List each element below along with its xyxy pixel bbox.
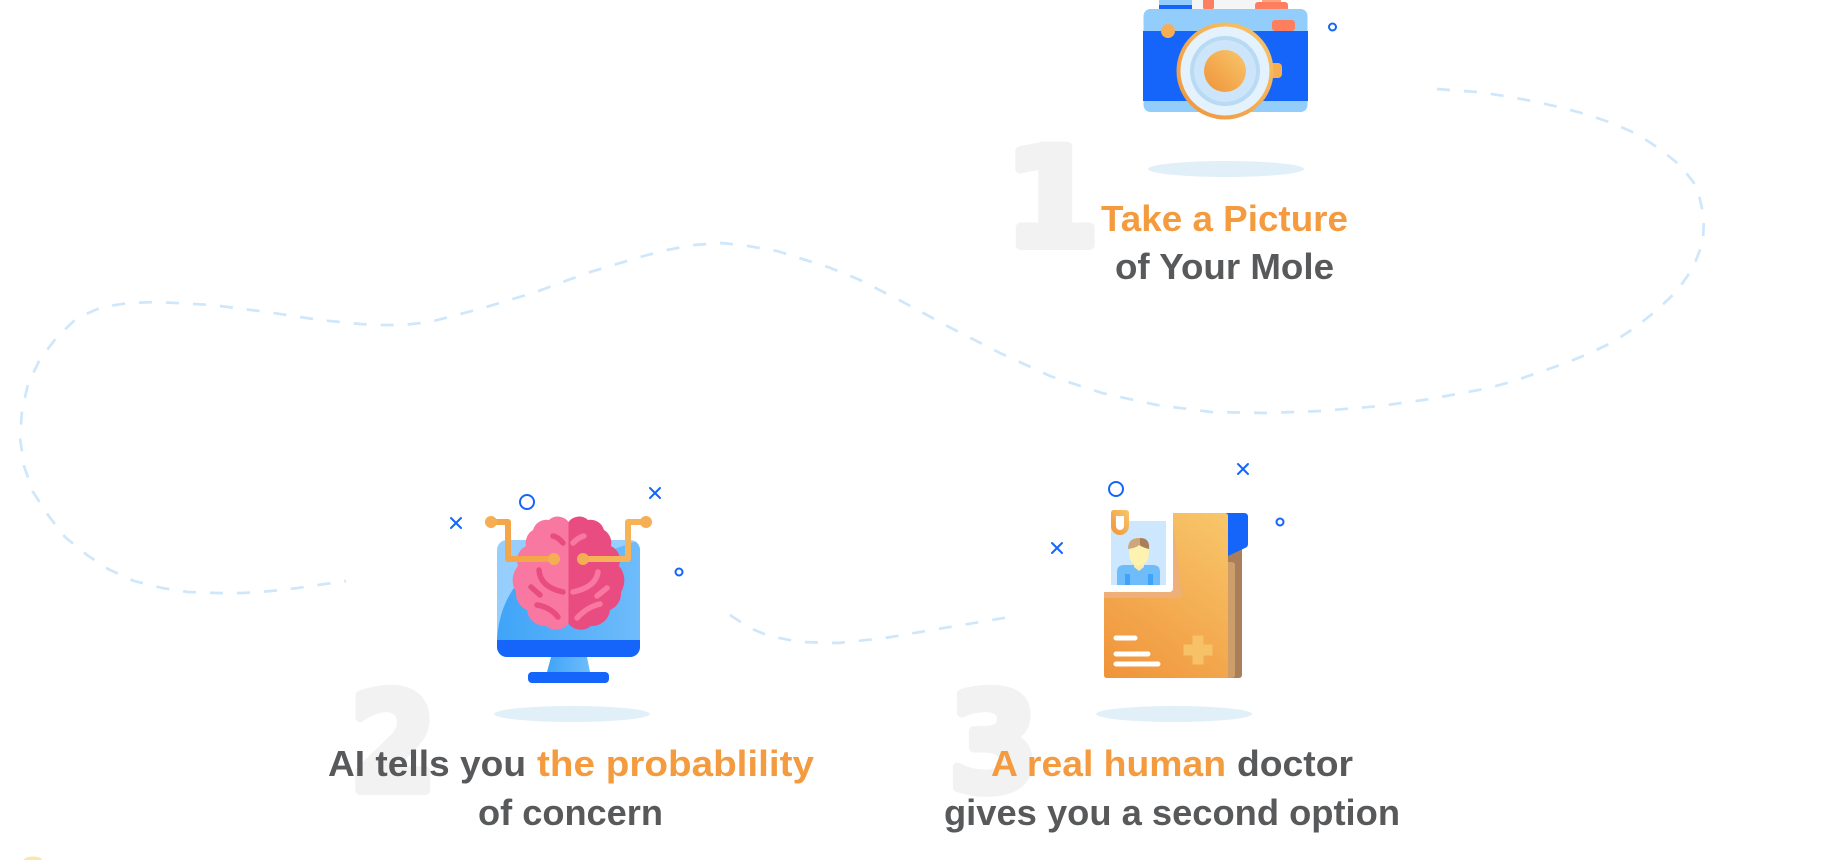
- decoration: small ring: [1329, 24, 1336, 30]
- caption: AI tells you the probability of concern: AI tells you: [328, 743, 526, 784]
- dashed route: from camera around to brain: [20, 89, 1704, 593]
- caption: a real human doctor gives you a second option: [944, 743, 1400, 833]
- icon: monitor with brain: [485, 516, 652, 683]
- text lines on folder: [1116, 638, 1158, 664]
- decoration: sparkles around brain: [451, 488, 682, 576]
- circuit right: [577, 516, 652, 565]
- icon: camera: [1143, 0, 1308, 120]
- paper clip: [1111, 510, 1129, 535]
- step 1 panel: [1005, 0, 1348, 287]
- shadow under camera: [1148, 161, 1304, 177]
- icon: patient folder: [1104, 510, 1248, 678]
- shadow under folder: [1096, 706, 1252, 722]
- decoration: sparkles around folder: [1052, 464, 1284, 553]
- decoration: yellow arc at bottom edge: [24, 856, 42, 860]
- caption: AI tells you the probability of concern: the probablility: [537, 743, 814, 784]
- person photo: [1117, 538, 1160, 585]
- caption: take a picture of your mole: [1101, 198, 1348, 287]
- circuit left: [485, 516, 560, 565]
- brain left half: [513, 516, 568, 630]
- number 3: 3: [949, 666, 1038, 823]
- dashed route: from brain to folder: [730, 615, 1010, 643]
- caption: take a picture of your mole: Take a Picture: [1101, 198, 1348, 239]
- caption: AI tells you the probability of concern: [328, 743, 814, 833]
- number 1: 1: [1005, 120, 1099, 277]
- shadow under monitor: [494, 706, 650, 722]
- caption: AI tells you the probability of concern: of concern: [478, 792, 663, 833]
- caption: a real human doctor gives you a second option: doctor: [1237, 743, 1353, 784]
- step 3 panel: [944, 464, 1400, 833]
- caption: a real human doctor gives you a second option: A real human: [991, 743, 1226, 784]
- number 2: 2: [350, 665, 436, 822]
- caption: take a picture of your mole: of Your Mole: [1115, 246, 1334, 287]
- brain right half: [568, 516, 624, 630]
- plus sign: [1184, 636, 1212, 664]
- step 2 panel: [328, 488, 814, 833]
- caption: a real human doctor gives you a second option: gives you a second option: [944, 792, 1400, 833]
